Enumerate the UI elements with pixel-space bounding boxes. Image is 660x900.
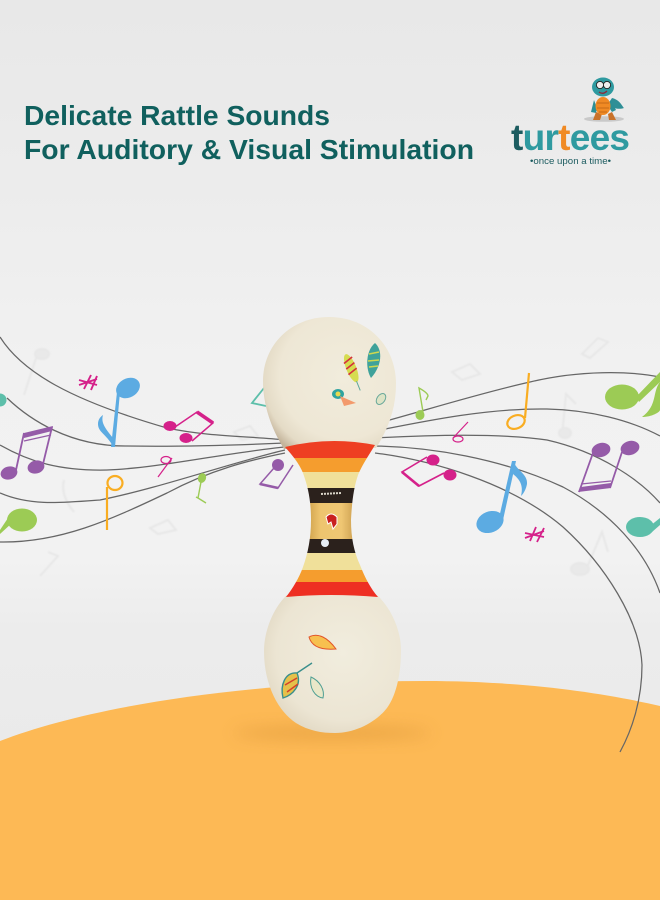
icon: green small note right [416,388,428,420]
rattle handle bands [285,441,378,597]
title [24,100,474,165]
icon: purple double note left [0,426,53,481]
feather: orange [332,389,356,406]
faint background notes [24,338,608,576]
logo: turtees [511,78,630,167]
logo wordmark: turtees [511,117,630,158]
title: For Auditory & Visual Stimulation [24,134,474,165]
icon: orange note left [107,476,122,530]
ground: orange curve [0,681,660,900]
icon: purple double note right [578,439,641,492]
left staff lines [0,337,285,542]
icon: magenta small note left [158,456,172,477]
rattle top ball [263,317,396,449]
icon: green small note left [196,472,207,503]
handle flower [321,539,329,547]
icon: turtle mascot [584,78,624,122]
handle emblem [326,514,337,529]
rattle [263,317,401,733]
icon: orange note right [505,373,529,431]
icon: magenta small note right [453,422,468,442]
left notes [0,374,293,534]
icon: sharp magenta right [525,527,544,542]
icon: blue note right [473,461,527,537]
icon: purple note behind rattle [260,459,293,488]
leaf: orange [309,635,336,649]
icon: magenta double note right [402,454,456,486]
icon: teal note right [626,517,660,537]
handle label text mark [321,493,341,494]
title: Delicate Rattle Sounds [24,100,330,131]
feather: teal [367,343,380,378]
leaf: small bottom [311,677,323,698]
rattle shadow [232,726,432,740]
music staff lines [0,337,660,752]
icon: green big note right [605,372,660,417]
icon: teal note left edge [0,394,6,406]
icon: teal note behind rattle [252,388,266,406]
feather: chevron bottom [282,663,312,698]
logo tagline: •once upon a time• [530,156,611,167]
right notes [402,372,660,542]
icon: blue note left [98,374,143,447]
icon: magenta double note left [164,412,213,443]
feather: small [374,392,388,406]
icon: sharp magenta left [79,375,97,390]
icon: green note left [0,508,37,534]
feather: striped yellow [341,352,365,392]
right staff lines [375,373,660,752]
rattle bottom ball [264,595,401,733]
